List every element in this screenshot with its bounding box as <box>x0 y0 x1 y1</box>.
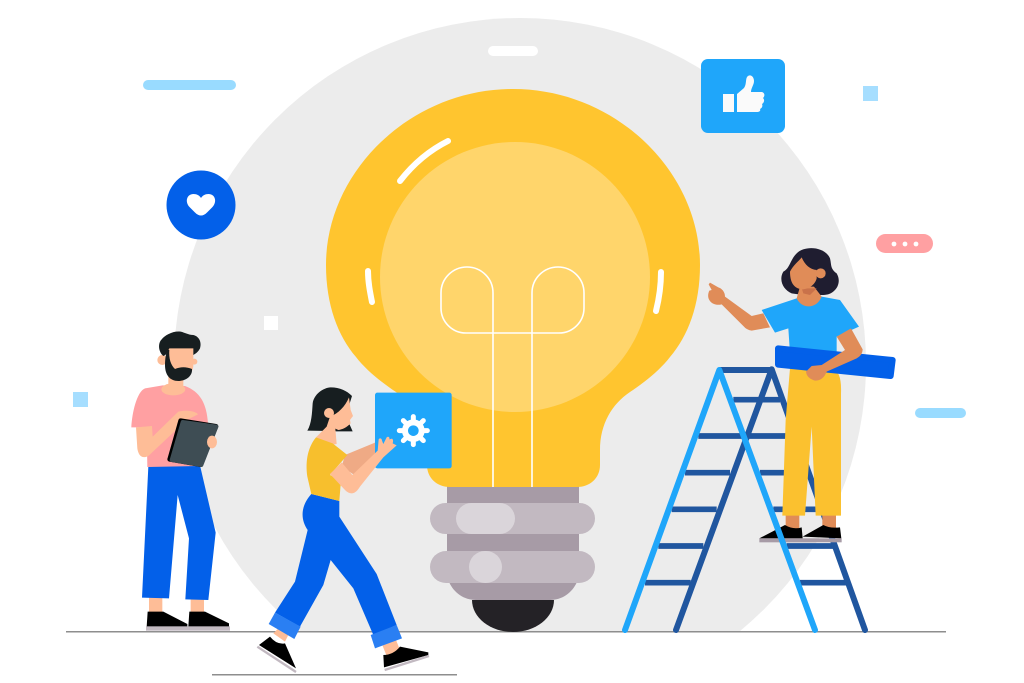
glass highlights <box>368 141 661 311</box>
shirt <box>131 385 208 467</box>
other arm <box>806 328 863 381</box>
filament <box>441 267 584 487</box>
icon: thumbs up badge <box>701 59 785 133</box>
shirt <box>307 437 347 501</box>
legs and shoes <box>142 465 230 631</box>
back arm <box>342 443 375 475</box>
background circle <box>174 18 866 683</box>
arm <box>136 411 198 457</box>
bulb glass <box>326 89 700 487</box>
gear card <box>375 393 452 468</box>
pointing arm <box>708 283 770 331</box>
person: man with tablet <box>131 332 230 631</box>
tablet <box>170 421 217 465</box>
head <box>307 387 353 445</box>
head and hair <box>781 248 839 306</box>
bulb base <box>430 485 595 632</box>
shirt <box>762 297 859 353</box>
head <box>157 332 201 395</box>
bulb inner glow <box>380 142 650 412</box>
front arm <box>330 437 397 493</box>
ground lines <box>66 631 946 676</box>
ladder front frame <box>625 370 815 630</box>
person: woman on ladder pointing <box>708 248 893 542</box>
icon: speech bubble dots <box>876 234 933 253</box>
legs and shoes <box>759 368 842 542</box>
decorative floating shapes <box>73 46 966 418</box>
legs and shoes <box>257 494 429 672</box>
person: woman with gear card <box>257 387 452 672</box>
held blue board <box>778 348 893 376</box>
light bulb <box>326 89 700 632</box>
icon: heart badge <box>166 170 236 240</box>
ladder back frame <box>645 369 865 630</box>
